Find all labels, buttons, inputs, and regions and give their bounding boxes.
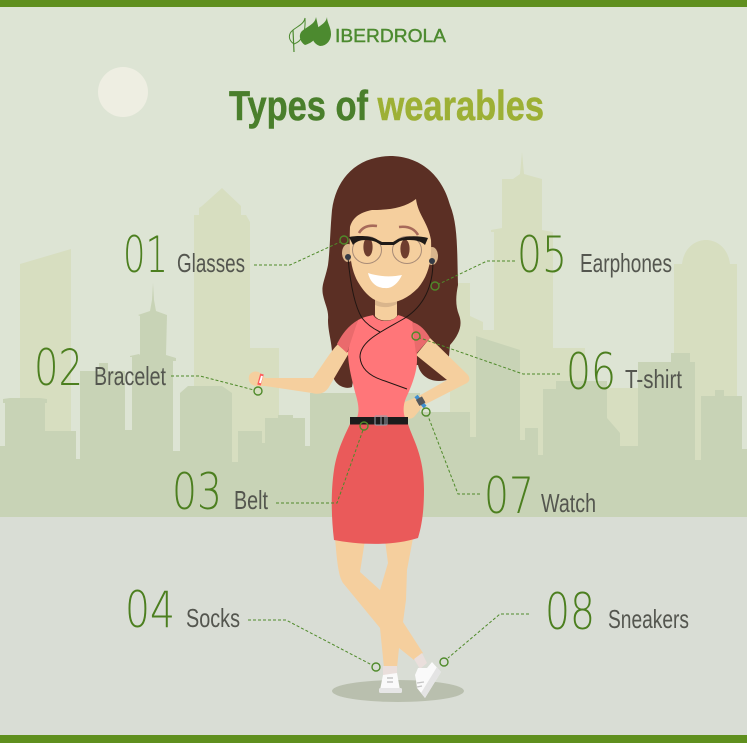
callout 07 Watch: 07 bbox=[484, 467, 534, 525]
callout 04 Socks bbox=[125, 581, 380, 671]
icon: watch bbox=[416, 396, 425, 407]
icon: leaves bbox=[289, 17, 331, 52]
icon: right sneaker bbox=[415, 662, 441, 698]
callout 06 T-shirt: T-shirt bbox=[625, 364, 683, 394]
icon: earphones bbox=[345, 254, 435, 389]
hair bbox=[322, 156, 461, 388]
left sleeve bbox=[337, 320, 358, 353]
callout 02 Bracelet bbox=[34, 339, 262, 397]
callout 07 Watch bbox=[422, 408, 596, 525]
callout 06 T-shirt bbox=[412, 332, 683, 401]
callout 03 Belt bbox=[172, 422, 368, 521]
callout 07 Watch: Watch bbox=[541, 488, 596, 518]
top bar bbox=[0, 0, 747, 7]
callout 05 Earphones: Earphones bbox=[580, 248, 672, 278]
right sleeve bbox=[412, 322, 430, 354]
callout 08 Sneakers bbox=[440, 583, 689, 666]
callout 02 Bracelet: Bracelet bbox=[94, 361, 167, 391]
icon: left sneaker bbox=[379, 673, 402, 693]
ground shadow bbox=[332, 680, 464, 702]
callout 05 Earphones bbox=[431, 226, 672, 290]
title: Types of wearables bbox=[229, 82, 544, 129]
callout 02 Bracelet: 02 bbox=[34, 339, 83, 397]
character bbox=[249, 156, 469, 698]
skyline: front buildings bbox=[0, 283, 747, 517]
face bbox=[350, 199, 431, 303]
callout 06 T-shirt: 06 bbox=[566, 343, 616, 401]
callout 05 Earphones: 05 bbox=[517, 226, 567, 284]
callout 04 Socks: Socks bbox=[186, 603, 240, 633]
icon: belt bbox=[350, 416, 408, 425]
eyes bbox=[363, 238, 373, 256]
callout 04 Socks: 04 bbox=[125, 581, 175, 639]
callout 08 Sneakers: Sneakers bbox=[608, 604, 689, 634]
smile bbox=[368, 273, 402, 288]
right arm bbox=[402, 338, 469, 419]
icon: glasses bbox=[349, 236, 428, 264]
bottom bar bbox=[0, 735, 747, 743]
neck bbox=[375, 296, 397, 320]
wordmark: IBERDROLA bbox=[335, 26, 446, 46]
ears bbox=[342, 244, 354, 262]
left arm bbox=[249, 344, 349, 394]
dress top bbox=[348, 315, 417, 418]
skyline: back buildings bbox=[20, 152, 737, 470]
icon: bracelet bbox=[259, 374, 262, 385]
ground bbox=[0, 517, 747, 735]
callout 03 Belt: 03 bbox=[172, 463, 222, 521]
legs bbox=[335, 538, 423, 668]
socks bbox=[383, 653, 427, 675]
callout 03 Belt: Belt bbox=[234, 485, 269, 515]
logo: Iberdrola bbox=[289, 17, 446, 52]
callout 08 Sneakers: 08 bbox=[545, 583, 595, 641]
eyebrows bbox=[359, 226, 418, 235]
dress skirt bbox=[332, 424, 424, 544]
sun bbox=[98, 67, 148, 117]
callout 01 Glasses: Glasses bbox=[177, 248, 245, 278]
callout 01 Glasses: 01 bbox=[123, 226, 168, 284]
callout 01 Glasses bbox=[123, 226, 348, 284]
